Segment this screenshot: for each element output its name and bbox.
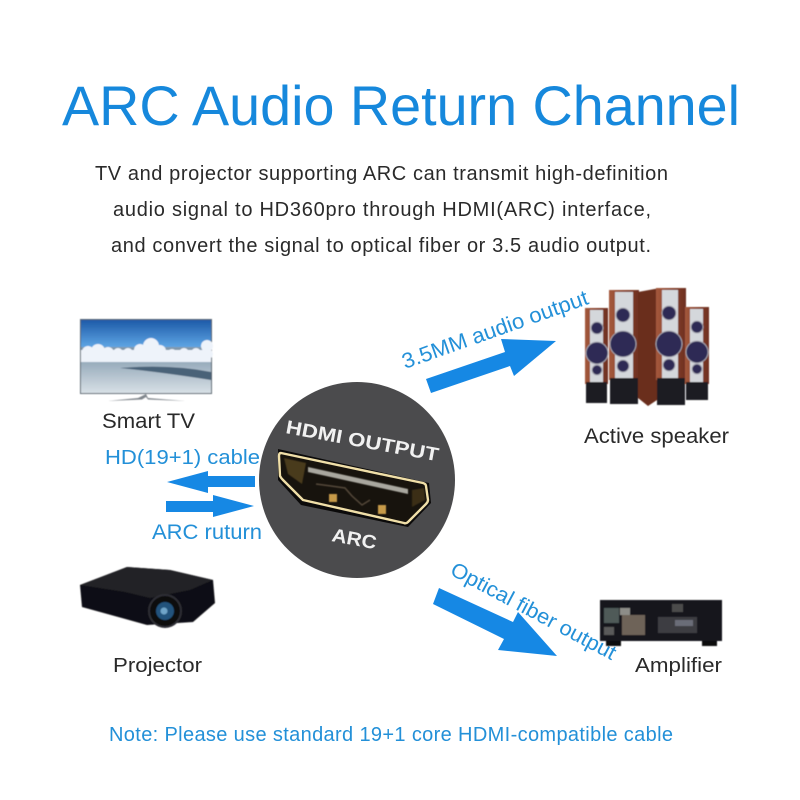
label: Optical fiber output: Optical fiber output: [447, 558, 620, 665]
title: ARC Audio Return Channel: [62, 74, 740, 137]
arrow: ARC return right: [166, 495, 254, 517]
note: Note: Please use standard 19+1 core HDMI-compatible cable: [109, 724, 673, 746]
label: Projector: Projector: [113, 654, 202, 677]
icon: amplifier: [600, 600, 722, 646]
icon: smart TV: [80, 319, 213, 401]
HDMI port circle: [259, 382, 455, 578]
label: ARC ruturn: ARC ruturn: [152, 521, 262, 544]
label: Smart TV: Smart TV: [102, 409, 196, 433]
label: ARC: ARC: [330, 525, 378, 554]
connector shell: [278, 449, 431, 527]
label: 3.5MM audio output: 3.5MM audio output: [399, 286, 591, 374]
label: Amplifier: Amplifier: [635, 654, 722, 677]
arrow: to active speaker: [426, 339, 556, 393]
label: HD(19+1) cable: HD(19+1) cable: [105, 446, 260, 469]
label: HDMI OUTPUT: HDMI OUTPUT: [284, 417, 441, 466]
description text: and convert the signal to optical fiber or 3.5 audio output.: [111, 235, 651, 257]
description text: [95, 163, 668, 257]
description text: TV and projector supporting ARC can transmit high-definition: [95, 163, 668, 185]
arrow: HD cable left: [167, 471, 255, 493]
icon: projector: [80, 567, 215, 627]
label: Active speaker: Active speaker: [584, 425, 729, 448]
description text: audio signal to HD360pro through HDMI(ARC) interface,: [113, 199, 651, 221]
icon: active speakers: [585, 288, 709, 406]
arrow: to amplifier: [433, 588, 557, 656]
